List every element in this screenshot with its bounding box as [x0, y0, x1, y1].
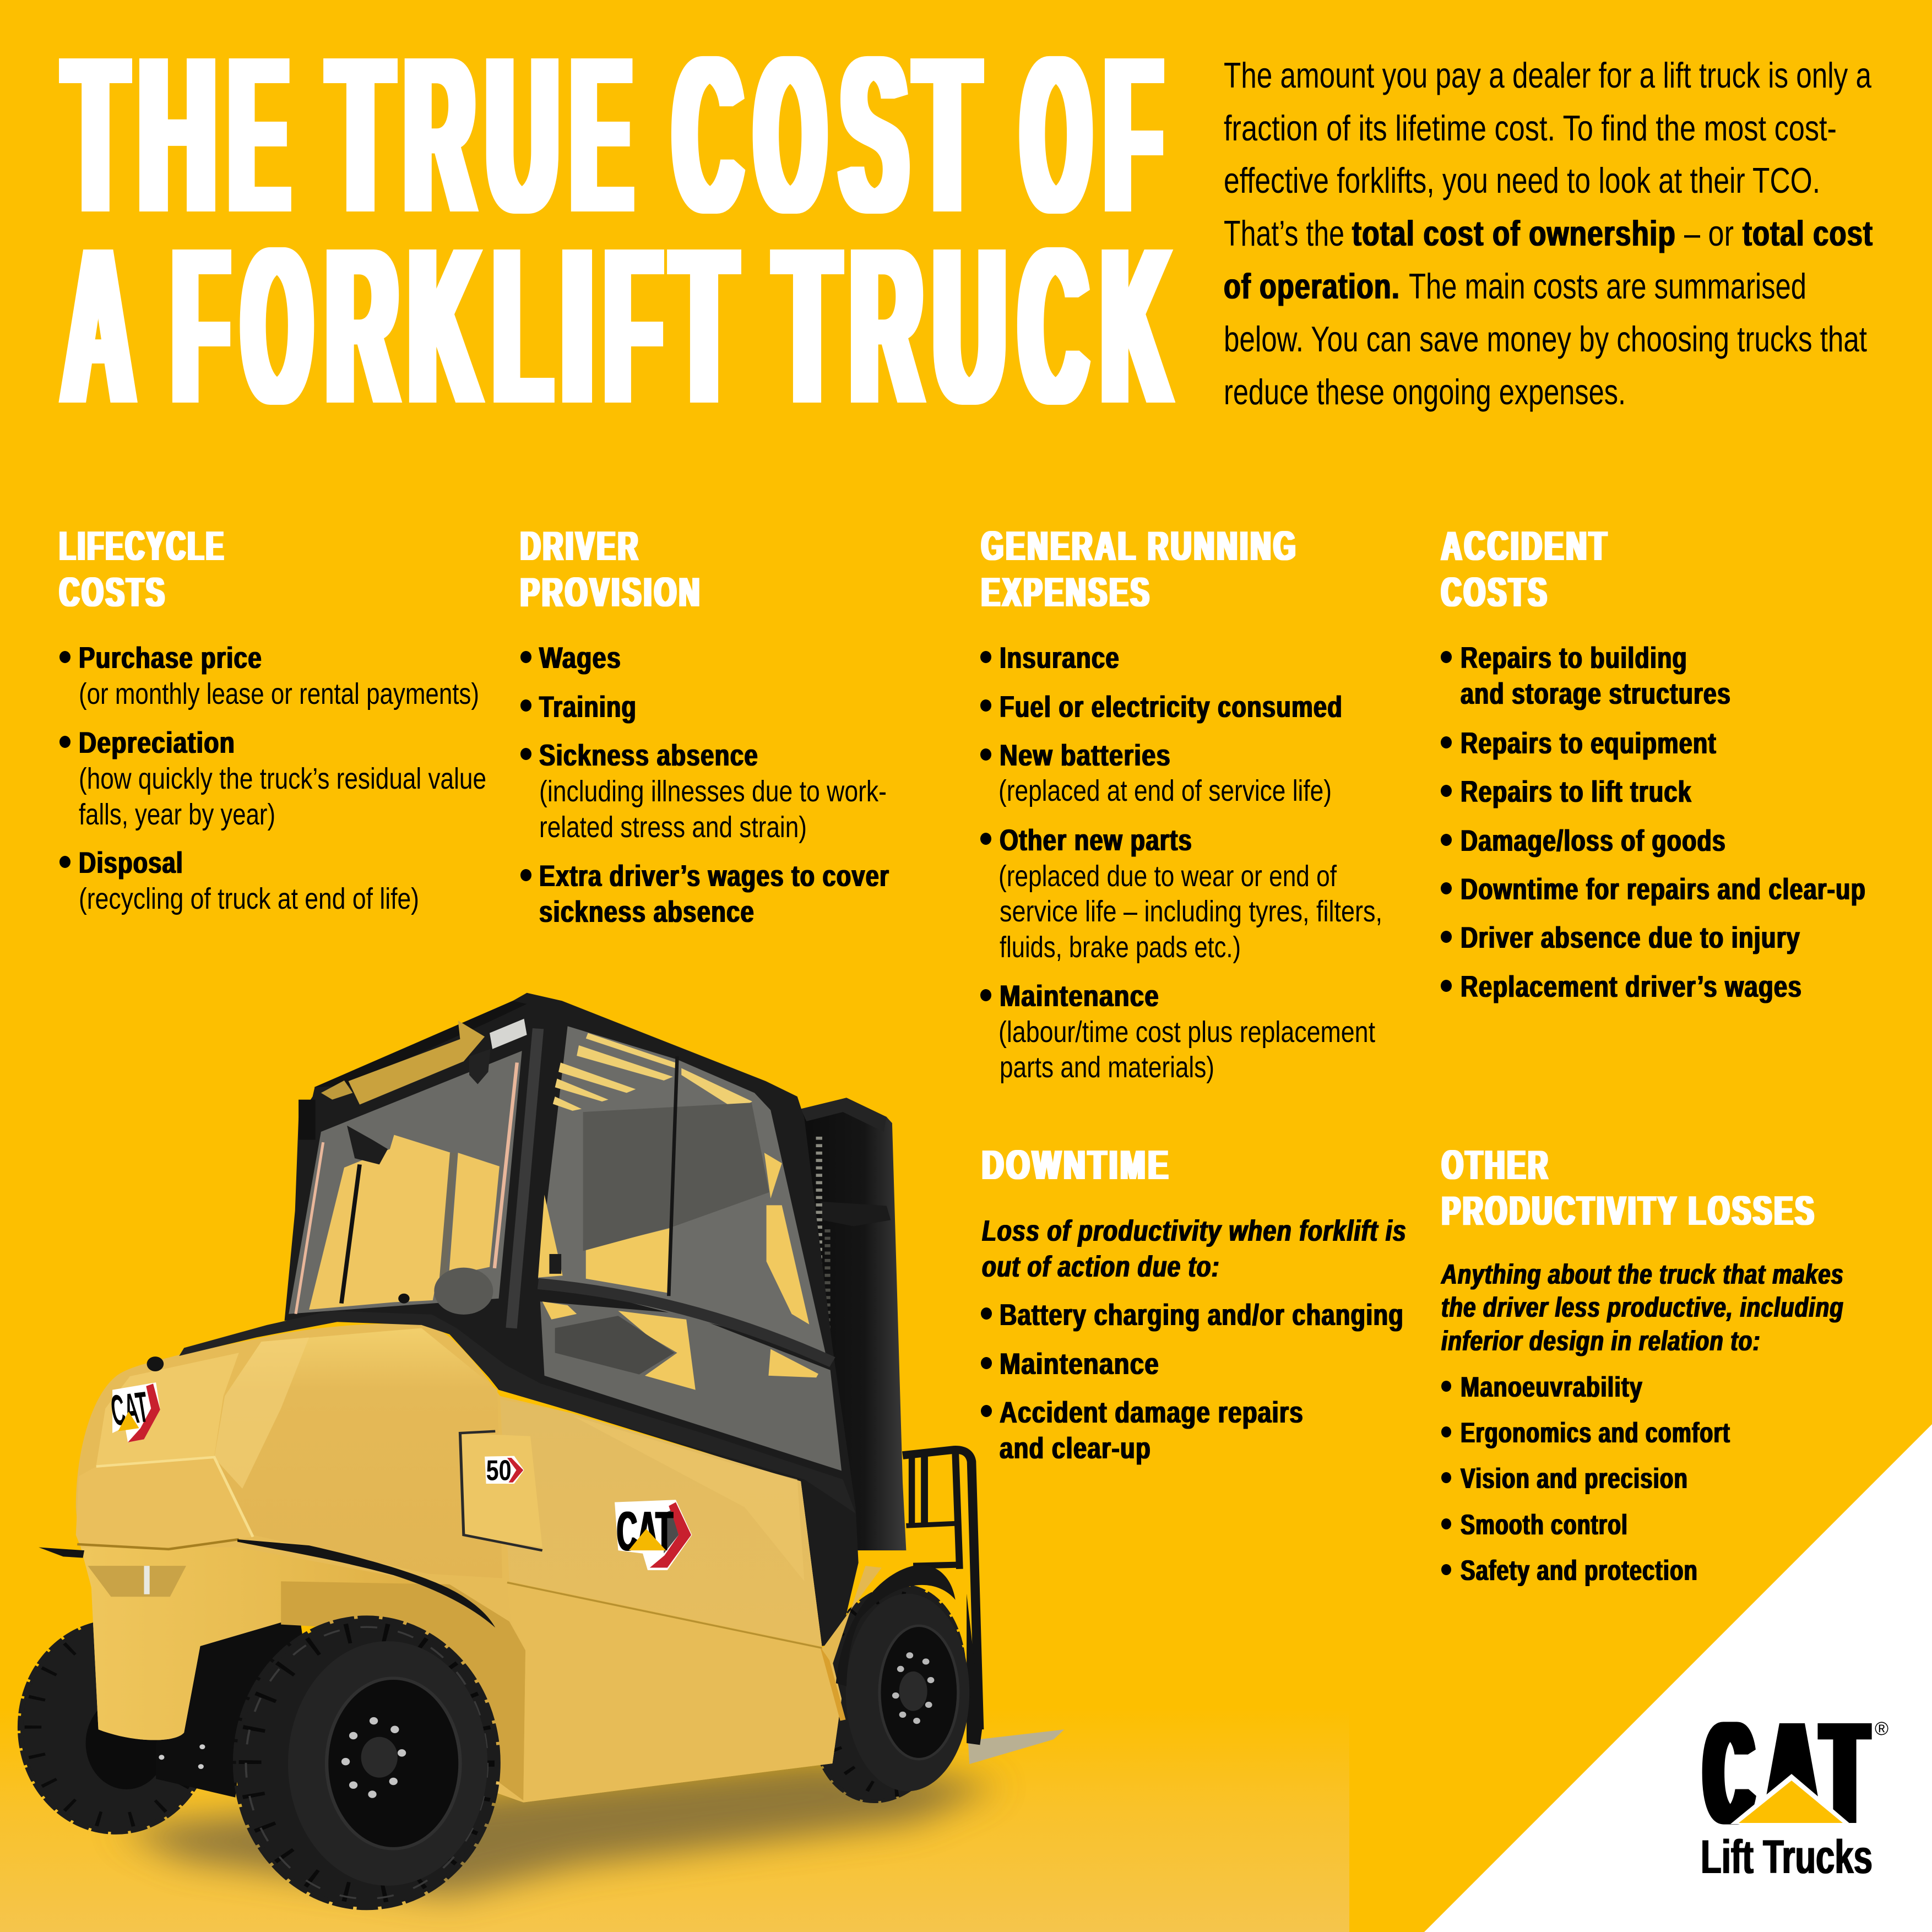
list: general running expenses: fluids, brake pads etc.) — [1000, 931, 1241, 964]
title: S — [841, 10, 907, 259]
heading: driver provision: PROVISION — [520, 569, 702, 615]
fork — [968, 1729, 1064, 1764]
forklift truck illustration — [20, 993, 1064, 1907]
heading: lifecycle costs — [59, 523, 226, 615]
list: general running expenses: Maintenance — [1000, 979, 1159, 1013]
list: general running expenses: New batteries — [1000, 738, 1171, 772]
list: downtime — [981, 1298, 1404, 1465]
panel: driver provision — [520, 523, 889, 929]
title: U — [934, 201, 1005, 450]
list: accident costs: and storage structures — [1461, 676, 1731, 710]
list: general running expenses: (replaced at end of service life) — [998, 774, 1332, 807]
list: general running expenses: Other new parts — [1000, 823, 1192, 857]
title: K — [409, 201, 480, 450]
heading: other productivity losses — [1442, 1142, 1816, 1234]
title: A — [63, 201, 132, 450]
list: lifecycle costs: Purchase price — [79, 641, 262, 675]
intro: other productivity losses: inferior design in relation to: — [1441, 1325, 1761, 1356]
logo: CAT Lift Trucks: T — [1824, 1692, 1866, 1854]
list: downtime: Accident damage repairs — [1000, 1395, 1304, 1429]
list: general running expenses: Insurance — [1000, 641, 1120, 675]
panel: accident costs — [1441, 523, 1866, 1003]
list: accident costs: Damage/loss of goods — [1461, 823, 1726, 858]
list: accident costs: Repairs to equipment — [1461, 726, 1717, 760]
door pillar highlight — [512, 1029, 538, 1328]
side panel facet — [573, 1416, 804, 1581]
crease lines — [77, 1457, 253, 1549]
title: R — [851, 201, 922, 450]
title: T — [64, 10, 127, 259]
list: driver provision: Extra driver’s wages to cover — [539, 859, 889, 893]
main rear wheel — [236, 1618, 497, 1907]
intro: downtime: out of action due to: — [982, 1250, 1220, 1283]
list: other productivity losses — [1441, 1371, 1730, 1587]
intro: downtime — [982, 1214, 1407, 1283]
intro paragraph — [1224, 55, 1873, 412]
title: E — [230, 10, 288, 259]
list: driver provision — [520, 641, 889, 929]
under arch shadow — [281, 1581, 525, 1800]
door rail — [538, 1284, 832, 1362]
rear centre panel — [214, 1328, 502, 1578]
list: general running expenses: parts and materials) — [1000, 1051, 1214, 1084]
panel: general running expenses — [980, 523, 1382, 1084]
far rear wheel — [20, 1622, 211, 1832]
heading: downtime: DOWNTIME — [982, 1142, 1171, 1188]
title: I — [561, 201, 593, 450]
chassis between wheels — [156, 1609, 309, 1798]
heading: general running expenses: GENERAL RUNNING — [981, 523, 1298, 569]
list: general running expenses: Fuel or electricity consumed — [1000, 690, 1343, 724]
list: other productivity losses: Smooth control — [1461, 1509, 1628, 1541]
heading: accident costs: COSTS — [1441, 569, 1549, 615]
intro paragraph: of operation. — [1224, 266, 1400, 306]
list: driver provision: (including illnesses due to work- — [539, 775, 887, 808]
list: lifecycle costs: Disposal — [79, 845, 183, 880]
title: C — [674, 10, 741, 259]
title: E — [572, 10, 631, 259]
list: lifecycle costs: falls, year by year) — [79, 798, 275, 831]
list: driver provision: Wages — [539, 641, 621, 675]
logo wordmark CAT: C — [1706, 1692, 1751, 1854]
badge: 50: 50 — [486, 1455, 512, 1486]
hatch door — [460, 1431, 542, 1550]
intro: other productivity losses — [1440, 1258, 1844, 1356]
intro paragraph: The main costs are summarised — [1409, 266, 1806, 306]
list: other productivity losses: Vision and precision — [1461, 1463, 1688, 1495]
logo triangle — [1730, 1774, 1850, 1824]
heading: other productivity losses: OTHER — [1442, 1142, 1550, 1188]
title: C — [1020, 201, 1087, 450]
list: accident costs: Replacement driver’s wages — [1461, 969, 1802, 1003]
rear band — [76, 1458, 253, 1548]
list: driver provision: Sickness absence — [539, 738, 758, 772]
list: general running expenses — [980, 641, 1382, 1084]
heading: driver provision: DRIVER — [520, 523, 641, 569]
title: O — [1022, 10, 1090, 259]
heading: lifecycle costs: COSTS — [59, 569, 167, 615]
list: lifecycle costs: (recycling of truck at end of life) — [79, 882, 419, 915]
title: F — [173, 201, 228, 450]
list: lifecycle costs: Depreciation — [79, 725, 235, 759]
roof and visor — [299, 1001, 527, 1140]
floor glow — [0, 1707, 1349, 1932]
text: K — [1102, 201, 1170, 450]
registered mark: ® — [1875, 1718, 1888, 1739]
mast — [801, 1098, 906, 1550]
intro paragraph: total cost of ownership — [1352, 213, 1676, 253]
list: other productivity losses: Ergonomics and comfort — [1461, 1417, 1730, 1449]
list: accident costs: Driver absence due to injury — [1461, 920, 1800, 954]
list: lifecycle costs: (how quickly the truck’s residual value — [79, 762, 486, 795]
panel: downtime — [981, 1142, 1407, 1465]
list: driver provision: Training — [539, 690, 637, 724]
badge: CAT on side panel — [615, 1500, 692, 1570]
intro paragraph: total cost — [1743, 213, 1873, 253]
title: T — [775, 201, 839, 450]
badge: CAT on rear — [107, 1382, 160, 1442]
list: accident costs — [1441, 641, 1866, 1003]
arch trim — [237, 1539, 495, 1627]
side panel — [500, 1399, 822, 1646]
logo wordmark CAT: A — [1766, 1692, 1818, 1854]
list: general running expenses: service life – including tyres, filters, — [1000, 895, 1382, 928]
title: H — [139, 10, 216, 259]
title: T — [916, 10, 979, 259]
logo wordmark CAT — [1706, 1692, 1866, 1854]
rear highlight facet — [214, 1337, 309, 1489]
ground shadow — [120, 1757, 997, 1896]
heading: driver provision — [520, 523, 702, 615]
heading: accident costs: ACCIDENT — [1441, 523, 1609, 569]
list: downtime: and clear-up — [1000, 1431, 1151, 1465]
title: F — [605, 201, 661, 450]
list: driver provision: related stress and strain) — [539, 811, 807, 844]
load backrest — [903, 1450, 982, 1745]
list: lifecycle costs — [59, 641, 486, 915]
panel: other productivity losses — [1440, 1142, 1844, 1587]
rear window — [289, 1051, 522, 1315]
title: U — [487, 10, 558, 259]
title — [63, 10, 1170, 450]
filler cap — [147, 1356, 164, 1371]
badge: CAT on rear: CAT — [107, 1382, 151, 1435]
list: driver provision: sickness absence — [539, 894, 755, 929]
door glass lower — [540, 1301, 842, 1471]
intro paragraph: – or — [1684, 213, 1734, 253]
door glass upper — [538, 1026, 826, 1353]
drive wheel arch — [822, 1565, 956, 1686]
list: other productivity losses: Manoeuvrability — [1461, 1371, 1643, 1403]
body shell — [39, 1324, 843, 1803]
title: O — [756, 10, 825, 259]
panel: lifecycle costs — [59, 523, 486, 915]
heading: general running expenses: EXPENSES — [981, 569, 1152, 615]
title: R — [327, 201, 398, 450]
title: L — [494, 201, 551, 450]
intro: downtime: Loss of productivity when forklift is — [982, 1214, 1407, 1247]
cab — [285, 993, 859, 1646]
rear plate — [39, 1548, 84, 1558]
heading: accident costs — [1441, 523, 1609, 615]
badge: CAT on side panel: CAT — [617, 1500, 673, 1562]
heading: general running expenses — [981, 523, 1298, 615]
list: lifecycle costs: (or monthly lease or rental payments) — [79, 677, 479, 710]
list: other productivity losses: Safety and protection — [1461, 1555, 1698, 1587]
list: downtime: Battery charging and/or changing — [1000, 1298, 1404, 1332]
title: T — [672, 201, 736, 450]
list: accident costs: Repairs to building — [1461, 641, 1687, 675]
intro paragraph: reduce these ongoing expenses. — [1224, 372, 1626, 412]
list: downtime: Maintenance — [1000, 1347, 1159, 1381]
list: general running expenses: (replaced due to wear or end of — [998, 860, 1337, 893]
right front wheel — [793, 1575, 983, 1812]
intro paragraph: That’s the — [1224, 213, 1344, 253]
logo: CAT Lift Trucks — [1701, 1692, 1888, 1884]
rear lamp — [88, 1566, 186, 1597]
upper rear hump — [96, 1353, 239, 1465]
heading: lifecycle costs: LIFECYCLE — [59, 523, 226, 569]
rear lower post — [81, 1548, 492, 1740]
white corner triangle — [1424, 1424, 1932, 1932]
lower box — [507, 1582, 842, 1803]
text: F — [1105, 10, 1161, 259]
list: accident costs: Repairs to lift truck — [1461, 774, 1692, 808]
title: T — [329, 10, 392, 259]
cab frame — [285, 993, 859, 1646]
list: general running expenses: (labour/time cost plus replacement — [998, 1016, 1375, 1049]
title: O — [243, 201, 311, 450]
title: R — [405, 10, 474, 259]
hood and door trim strip — [179, 1311, 856, 1513]
